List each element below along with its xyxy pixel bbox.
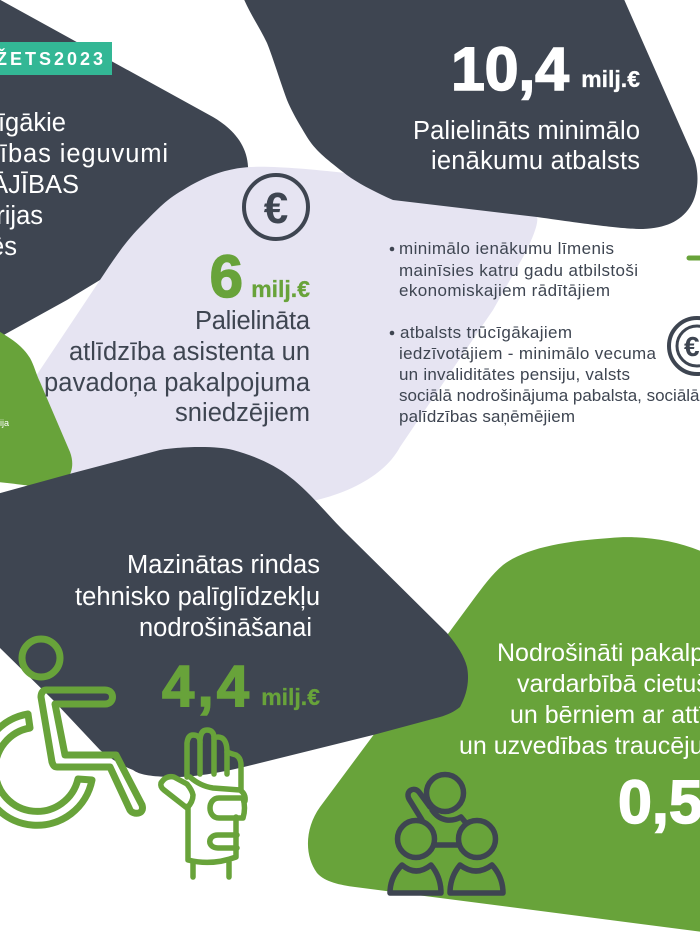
stat: 4,4 milj.€: milj.€	[261, 684, 320, 710]
text: minimum income support: Palielināts minimālo	[413, 117, 640, 145]
text: bullet list: iedzīvotājiem - minimālo vecuma	[399, 344, 657, 363]
icon: euro coin	[244, 175, 308, 239]
text: bullet list: mainīsies katru gadu atbilstoši	[399, 261, 638, 280]
text: queues	[75, 551, 320, 642]
stat: 6 milj.€: 6	[210, 243, 243, 310]
text: bullet list: palīdzības saņēmējiem	[399, 407, 575, 426]
panel: top left dark shape	[0, 0, 248, 337]
panel: lower dark shape	[0, 447, 468, 777]
stat: 10,4 milj.€: milj.€	[581, 66, 640, 92]
stat: 10,4 milj.€: 10,4	[451, 35, 569, 103]
text: bullet list: sociālā nodrošinājuma pabalsta, sociālās	[399, 386, 700, 405]
text: minimum income support	[413, 117, 640, 175]
text: queues: tehnisko palīglīdzekļu	[75, 583, 320, 611]
panel: top right dark shape	[243, 0, 697, 229]
text: minimum income support: ienākumu atbalsts	[431, 147, 640, 175]
stat: 4,4 milj.€	[162, 654, 320, 719]
panel: lower right green shape	[308, 537, 700, 932]
icon: wheelchair	[0, 639, 142, 825]
text: queues: Mazinātas rindas	[127, 551, 320, 579]
icon: cut-off euro target: €	[684, 331, 700, 362]
icon: group of people	[390, 774, 503, 893]
text: bullet list: minimālo ienākumu līmenis	[399, 239, 614, 258]
heading: top left text	[0, 109, 169, 261]
panel: left green shape	[0, 330, 72, 487]
text: assistant pay: Palielināta	[195, 307, 311, 335]
text: bullet list	[390, 239, 700, 426]
icon: hand in wrist brace	[161, 730, 245, 877]
stat: 6 milj.€: milj.€	[251, 276, 310, 302]
text: assistant pay: atlīdzība asistenta un	[69, 338, 310, 366]
text: assistant pay: pavadoņa pakalpojuma	[44, 369, 311, 397]
text: bullet list: ekonomiskajiem rādītājiem	[399, 281, 610, 300]
badge: budget 2023	[0, 42, 112, 75]
text: services for violence victims	[459, 639, 700, 760]
icon: euro coin: €	[264, 184, 288, 233]
panel: lavender shape	[30, 167, 537, 510]
icon: cut-off euro target	[669, 318, 700, 374]
text: bullet list: un invaliditātes pensiju, valsts	[399, 365, 630, 384]
stat: 4,4 milj.€: 4,4	[162, 654, 249, 719]
text: bullet list: atbalsts trūcīgākajiem	[400, 323, 572, 342]
icon: cut-off green stroke	[689, 256, 700, 260]
stat: 10,4 milj.€	[451, 35, 640, 103]
text: assistant pay	[44, 307, 311, 427]
text: queues: nodrošināšanai	[139, 614, 312, 642]
text: assistant pay: sniedzējiem	[175, 399, 310, 427]
stat: 6 milj.€	[210, 243, 310, 310]
